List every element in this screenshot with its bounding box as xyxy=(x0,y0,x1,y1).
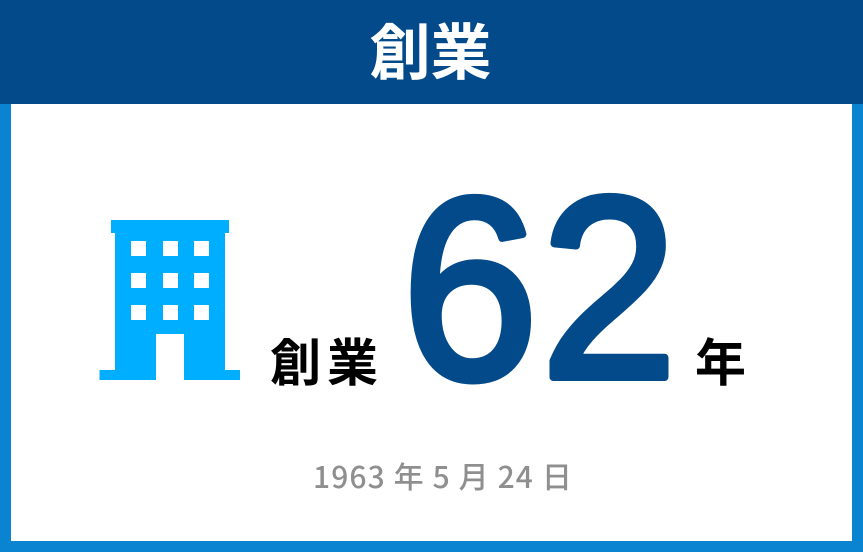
heading: 創業 xyxy=(369,3,492,92)
big number: 62 years xyxy=(402,143,677,433)
label: founding: 創業 xyxy=(270,322,384,396)
icon: office building xyxy=(100,220,240,380)
label: year: 年 xyxy=(695,322,746,396)
big number: 62 years: 2 xyxy=(541,143,677,432)
big number: 62 years: 6 xyxy=(402,144,538,433)
founding date: 1963 年 5 月 24 日 xyxy=(313,453,573,497)
header bar xyxy=(0,0,863,104)
